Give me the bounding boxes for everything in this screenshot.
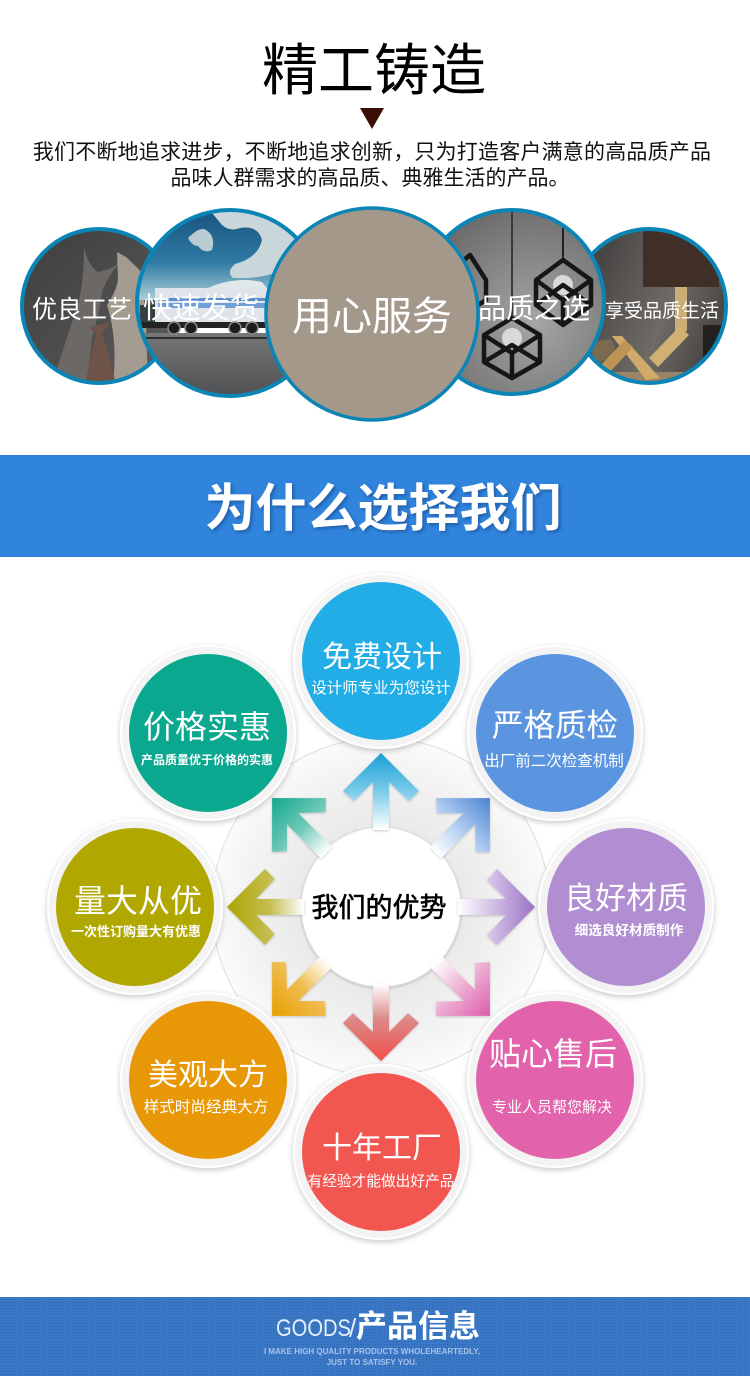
diagram: our advantages hub <box>212 738 550 1076</box>
badge: 良好材质: 细选良好材质制作 <box>575 922 684 938</box>
badge: 贴心售后 <box>468 993 642 1167</box>
intro text: 我们不断地追求进步，不断地追求创新，只为打造客户满意的高品质产品 <box>33 141 711 164</box>
hub disc <box>212 738 550 1076</box>
banner: why choose us <box>0 455 750 557</box>
arrows <box>227 753 535 1061</box>
badge: 美观大方: 样式时尚经典大方 <box>144 1098 268 1116</box>
badge: 十年工厂: 有经验才能做出好产品 <box>308 1173 454 1190</box>
banner: product info: GOODS <box>276 1315 351 1342</box>
badge: 价格实惠: 产品质量优于价格的实惠 <box>141 752 273 767</box>
title: 精工铸造 <box>262 39 486 102</box>
icon: down triangle <box>360 108 384 129</box>
circle: 用心服务 <box>266 208 478 420</box>
banner: product info <box>0 1297 750 1376</box>
banner: product info: I MAKE HIGH QUALITY PRODUCTS WHOLEHEARTEDLY, <box>264 1347 480 1356</box>
badge: 良好材质 <box>539 820 713 994</box>
circle: 品质之选 <box>446 208 606 396</box>
badge: 良好材质: 良好材质 <box>564 881 688 916</box>
circle: 享受品质生活 <box>588 227 728 385</box>
badge: 严格质检: 出厂前二次检查机制 <box>484 752 624 770</box>
circle: 用心服务: 用心服务 <box>292 295 452 339</box>
badge: 美观大方: 美观大方 <box>148 1059 268 1092</box>
badge: 免费设计: 设计师专业为您设计 <box>311 679 451 697</box>
badge: 美观大方 <box>121 993 295 1167</box>
badge: 十年工厂 <box>294 1065 468 1239</box>
circle: 优良工艺 <box>20 228 180 388</box>
circle: 品质之选: 品质之选 <box>478 293 590 324</box>
circle: 享受品质生活: 享受品质生活 <box>605 300 719 322</box>
badge: 价格实惠: 价格实惠 <box>143 709 271 745</box>
banner: why choose us: 为什么选择我们 <box>204 480 562 537</box>
badge: 贴心售后: 贴心售后 <box>489 1036 617 1072</box>
circle: 快速发货 <box>135 208 298 398</box>
badge: 严格质检: 严格质检 <box>492 707 618 743</box>
intro text: 品味人群需求的高品质、典雅生活的产品。 <box>170 167 570 190</box>
circle: 优良工艺: 优良工艺 <box>32 296 132 324</box>
badge: 量大从优: 一次性订购量大有优惠 <box>71 924 201 939</box>
badge: 量大从优: 量大从优 <box>74 883 202 919</box>
hub center circle <box>301 827 461 987</box>
badge: 价格实惠 <box>121 646 295 820</box>
banner: product info: JUST TO SATISFY YOU. <box>327 1358 417 1367</box>
hub center label: 我们的优势 <box>312 893 446 923</box>
banner: product info: / <box>349 1313 357 1343</box>
badge: 免费设计: 免费设计 <box>322 641 442 674</box>
banner: product info: 产品信息 <box>356 1309 480 1344</box>
badge: 十年工厂: 十年工厂 <box>322 1132 442 1165</box>
badge: 免费设计 <box>294 574 468 748</box>
badge: 贴心售后: 专业人员帮您解决 <box>492 1099 612 1116</box>
intro text <box>33 141 711 190</box>
badge: 量大从优 <box>48 820 222 994</box>
photo circles row <box>20 205 730 420</box>
circle: 快速发货: 快速发货 <box>143 292 259 325</box>
badge: 严格质检 <box>468 646 642 820</box>
